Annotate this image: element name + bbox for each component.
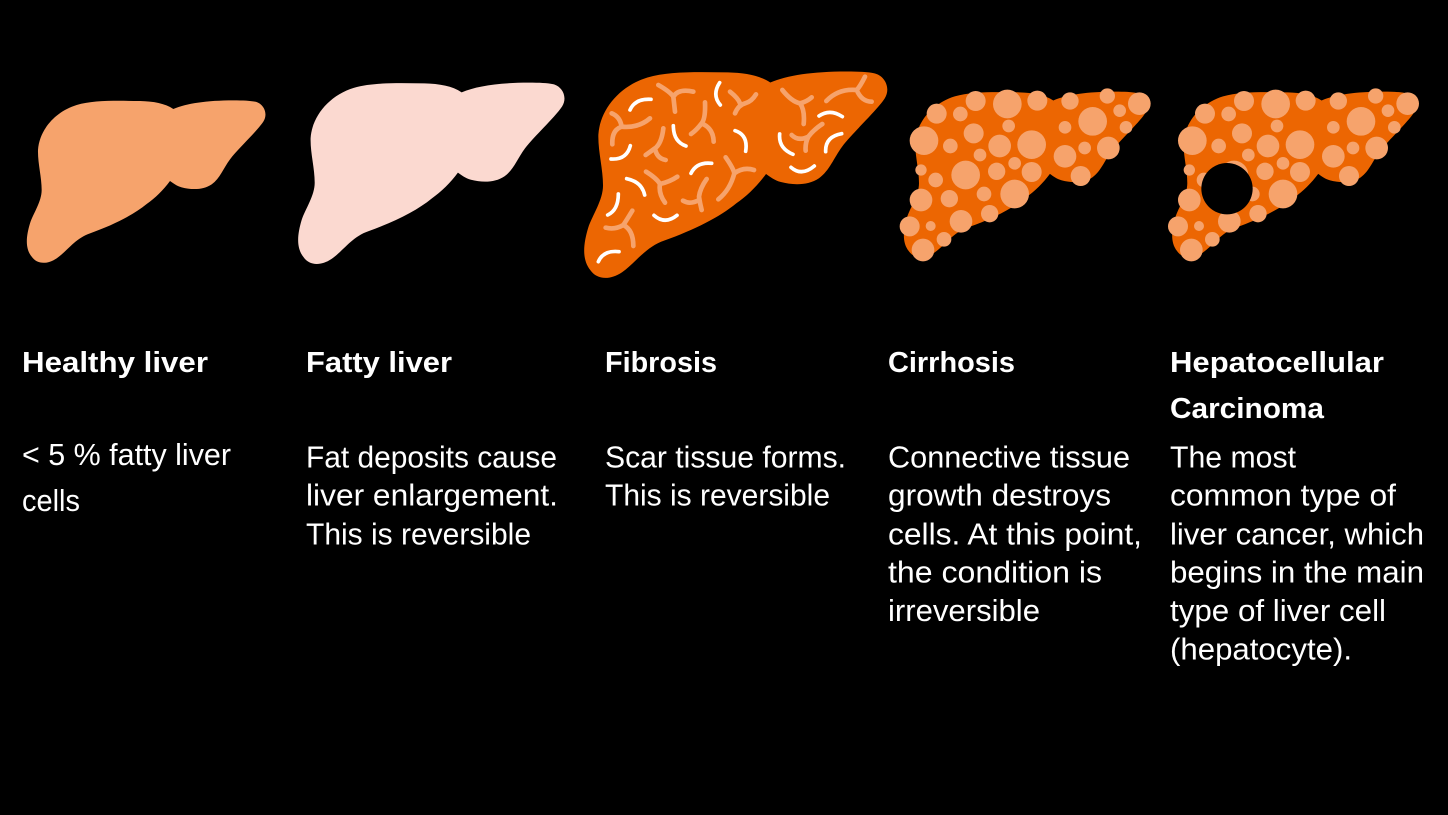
text block: cirrhosis description: growth destroys [888, 478, 1111, 513]
scar tissue marks [598, 77, 872, 262]
text block: cirrhosis description: the condition is [888, 555, 1102, 590]
text block: carcinoma description: The most [1170, 439, 1296, 474]
panel: healthy liver [22, 100, 265, 518]
text block: fatty liver description: Fat deposits cause [306, 439, 557, 474]
text block: carcinoma description: type of liver cell [1170, 593, 1386, 628]
liver silhouette [1172, 92, 1416, 257]
panel: fatty liver [298, 83, 564, 551]
panel: cirrhosis [888, 88, 1151, 628]
text block: fatty liver description: This is reversible [306, 516, 531, 551]
text block: carcinoma description: liver cancer, which [1170, 516, 1424, 551]
heading: fibrosis: Fibrosis [605, 347, 717, 379]
text block: carcinoma description: begins in the main [1170, 555, 1424, 590]
heading: hepatocellular carcinoma: Hepatocellular [1170, 347, 1384, 379]
icon: healthy liver [27, 100, 265, 263]
text block: fatty liver description: liver enlargement. [306, 478, 558, 513]
text block: carcinoma description [1170, 439, 1424, 667]
icon: fibrosis liver [584, 72, 887, 278]
text block: cirrhosis description: cells. At this point, [888, 516, 1142, 551]
text block: carcinoma description: (hepatocyte). [1170, 632, 1352, 667]
heading: fatty liver: Fatty liver [306, 347, 452, 379]
icon: cirrhosis liver [900, 88, 1151, 261]
text block: carcinoma description: common type of [1170, 478, 1396, 513]
heading: hepatocellular carcinoma: Carcinoma [1170, 393, 1325, 425]
text block: healthy liver description [22, 437, 231, 518]
heading: cirrhosis: Cirrhosis [888, 347, 1015, 379]
text block: cirrhosis description: irreversible [888, 593, 1040, 628]
text block: fibrosis description: This is reversible [605, 478, 830, 513]
text block: fatty liver description [306, 439, 558, 551]
text block: cirrhosis description: Connective tissue [888, 439, 1130, 474]
liver silhouette [904, 92, 1147, 257]
heading: hepatocellular carcinoma [1170, 347, 1384, 425]
panel: fibrosis [584, 72, 887, 513]
heading: healthy liver: Healthy liver [22, 347, 208, 379]
text block: fibrosis description: Scar tissue forms. [605, 439, 846, 474]
panel: hepatocellular carcinoma [1168, 88, 1424, 667]
text block: healthy liver description: < 5 % fatty liver [22, 437, 231, 472]
icon: fatty liver [298, 83, 564, 264]
text block: healthy liver description: cells [22, 483, 80, 518]
nodules [900, 88, 1151, 261]
liver silhouette [584, 72, 887, 278]
text block: fibrosis description [605, 439, 846, 513]
icon: carcinoma liver [1168, 88, 1419, 261]
text block: cirrhosis description [888, 439, 1142, 628]
nodules and tumour hole [1168, 88, 1419, 261]
